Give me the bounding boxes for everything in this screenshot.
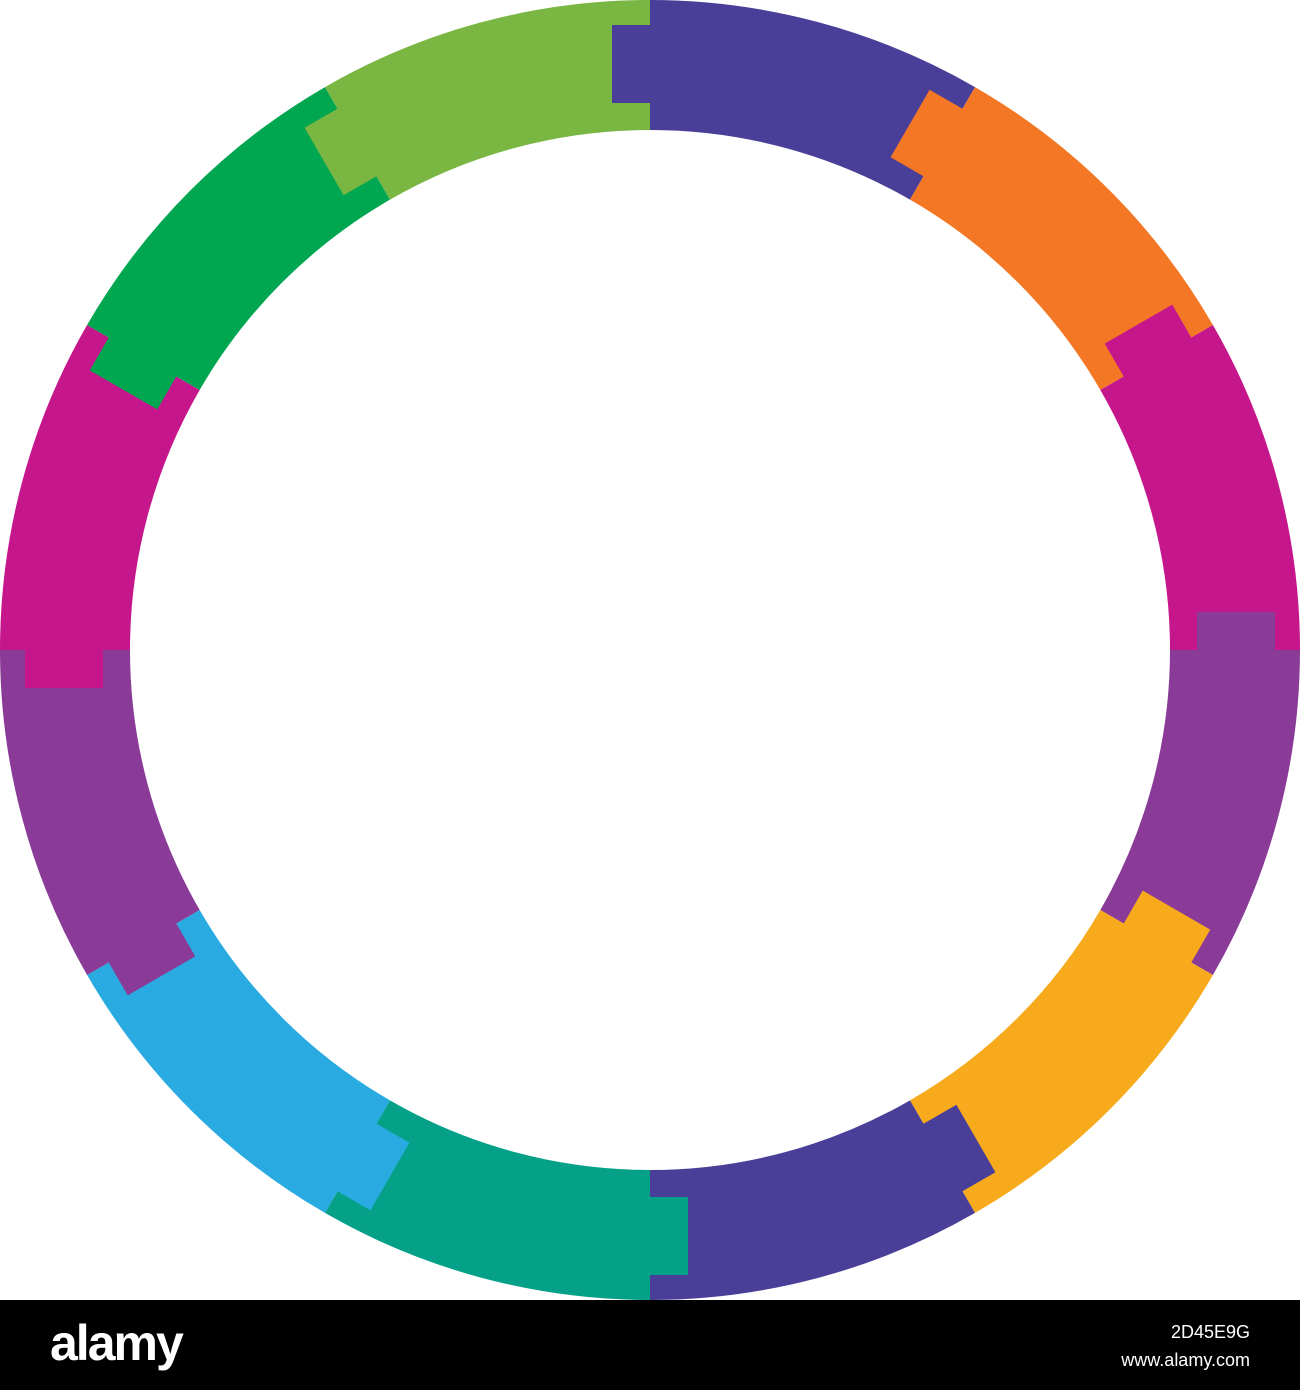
image id: 2D45E9G <box>1171 1322 1250 1342</box>
website: www.alamy.com <box>1121 1350 1250 1370</box>
footer bar <box>0 1300 1300 1390</box>
logo text: alamy <box>50 1315 182 1371</box>
